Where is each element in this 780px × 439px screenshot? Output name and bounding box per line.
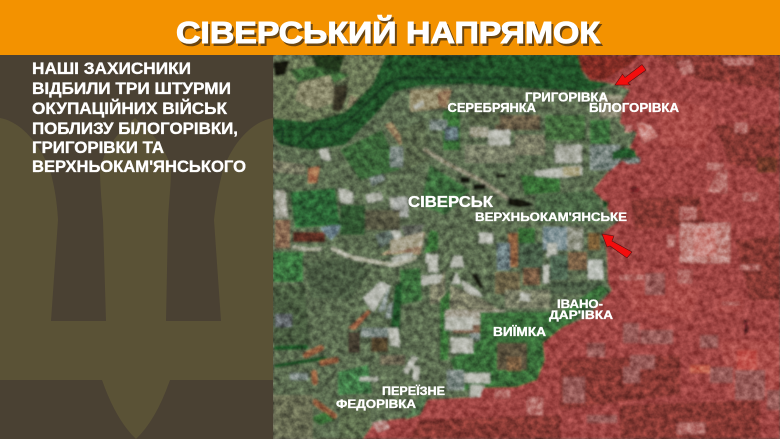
- upper center fields: [443, 110, 460, 150]
- label: Serebrianka: СЕРЕБРЯНКА: [448, 101, 536, 115]
- map: satellite view: [273, 55, 780, 439]
- forest and upper left terrain: [273, 55, 386, 122]
- label: Vyimka: ВИЇМКА: [493, 324, 546, 339]
- text block: summary: [32, 60, 246, 176]
- text block: summary: ОКУПАЦІЙНИХ ВІЙСЬК: [32, 99, 228, 118]
- red occupied zone: [363, 55, 780, 439]
- map texture: [273, 55, 780, 439]
- label: Pereizne: ПЕРЕЇЗНЕ: [382, 383, 445, 398]
- text block: summary: ВІДБИЛИ ТРИ ШТУРМИ: [32, 80, 231, 98]
- title: СІВЕРСЬКИЙ НАПРЯМОК: [178, 16, 602, 52]
- label: Ivano-Darivka: ІВАНО-: [557, 297, 603, 311]
- label: Ivano-Darivka: ДАР'ІВКА: [549, 308, 613, 322]
- label: Hryhorivka: ГРИГОРІВКА: [525, 90, 608, 104]
- label: Ivano-Darivka: [549, 297, 613, 322]
- text block: summary: НАШІ ЗАХИСНИКИ: [32, 60, 191, 78]
- label: Verkhnokamianske: ВЕРХНЬОКАМ'ЯНСЬКЕ: [475, 210, 627, 224]
- lower left fields: [361, 328, 388, 337]
- left fields: [275, 190, 288, 218]
- title: СІВЕРСЬКИЙ НАПРЯМОК: [176, 14, 600, 50]
- text block: summary: ВЕРХНЬОКАМ'ЯНСЬКОГО: [32, 158, 246, 176]
- header bar: [0, 0, 780, 55]
- panel: left text background: [0, 55, 273, 439]
- label: Fedorivka: ФЕДОРІВКА: [336, 397, 416, 411]
- text block: summary: ГРИГОРІВКИ ТА: [32, 139, 164, 157]
- label: Siversk: СІВЕРСЬК: [408, 194, 494, 211]
- text block: summary: ПОБЛИЗУ БІЛОГОРІВКИ,: [32, 120, 238, 138]
- central fields: [479, 233, 493, 243]
- icon: trident emblem: [0, 118, 273, 439]
- arrow: lower, pointing at Verkhnokamianske: [602, 234, 632, 258]
- arrow: upper, pointing at Bilohorivka: [615, 64, 646, 85]
- label: Bilohorivka: БІЛОГОРІВКА: [589, 101, 679, 115]
